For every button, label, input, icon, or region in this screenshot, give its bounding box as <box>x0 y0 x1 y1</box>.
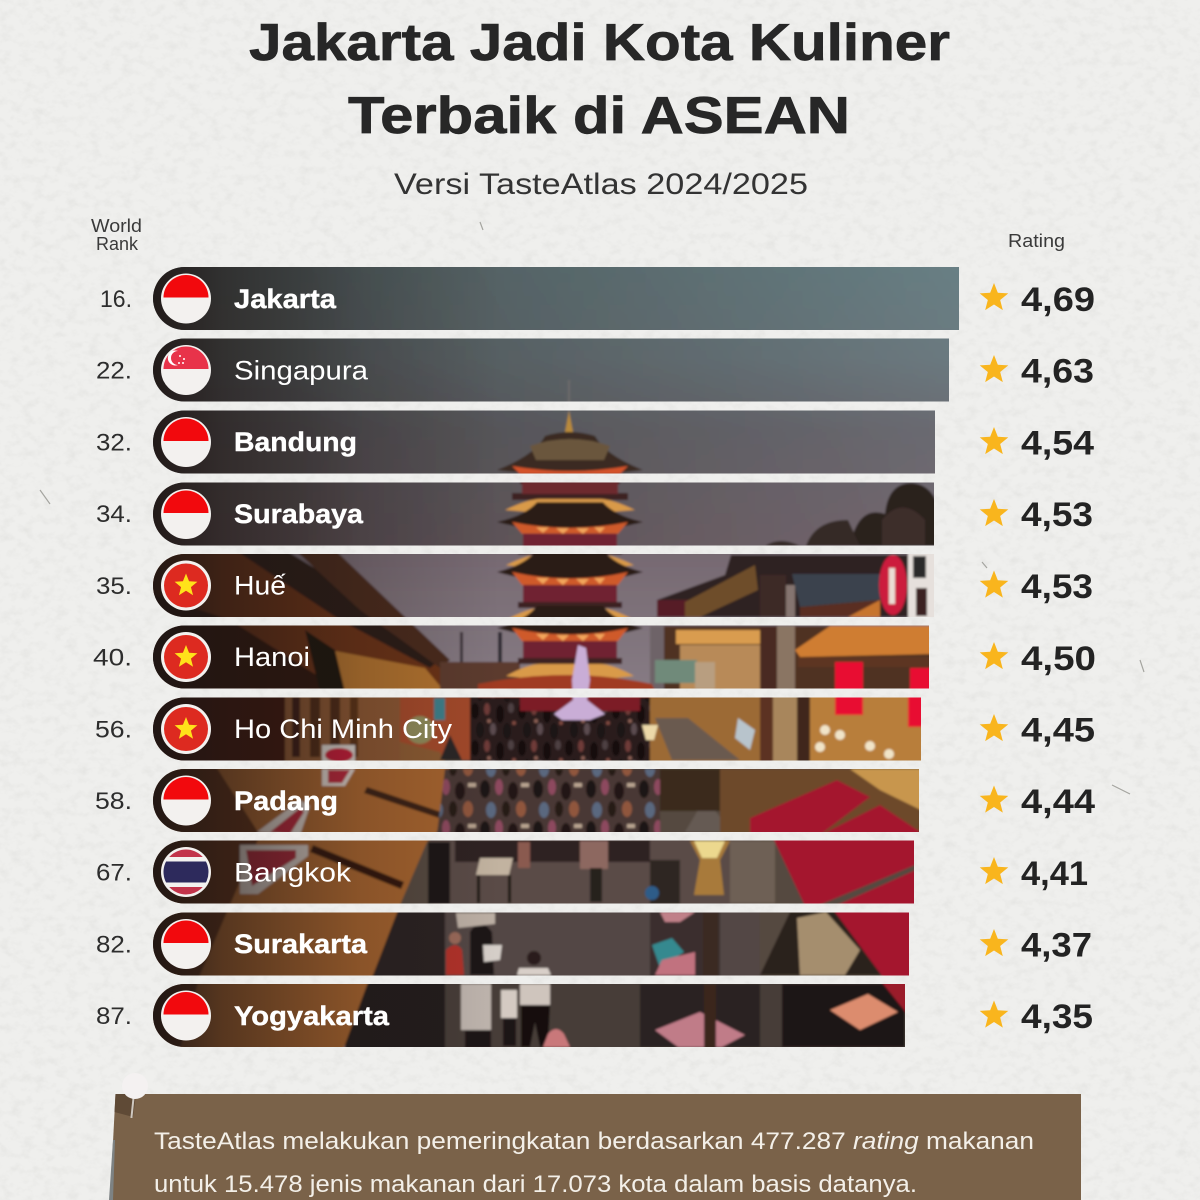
row 32 Bandung: 32. <box>96 430 132 456</box>
star <box>980 786 1008 813</box>
row 16 Jakarta: Jakarta <box>234 284 337 314</box>
right building upper <box>657 555 934 617</box>
icon: push pin <box>122 1073 148 1118</box>
row 16 Jakarta: 4,69 <box>1021 281 1095 319</box>
row 22 Singapura: 4,63 <box>1021 352 1094 390</box>
row 58 Padang: 58. <box>95 788 132 815</box>
red awnings <box>850 769 925 812</box>
row 32 Bandung: Bandung <box>234 427 357 457</box>
row 34 Surabaya: Surabaya <box>234 499 364 529</box>
flag: Indonesia <box>161 417 211 467</box>
crowd <box>470 697 650 762</box>
row 58 Padang: 4,44 <box>1021 783 1095 821</box>
photo bars: Jakarta street scene clipped to ranked bars <box>140 255 980 1065</box>
row 82 Surakarta: Surakarta <box>234 929 368 959</box>
row 34 Surabaya <box>96 489 1093 539</box>
row 34 Surabaya: 4,53 <box>1021 496 1093 534</box>
right building lower <box>648 698 762 760</box>
row 22 Singapura: 22. <box>96 358 132 384</box>
title: Terbaik di ASEAN <box>348 87 850 145</box>
row 40 Hanoi <box>93 632 1096 682</box>
row 35 Hue: Huế <box>234 570 286 600</box>
row 82 Surakarta: 4,37 <box>1021 926 1092 964</box>
pagoda <box>568 380 570 412</box>
column header: world rank: Rank <box>96 234 139 254</box>
row 56 Ho Chi Minh City <box>95 704 1095 754</box>
row 22 Singapura <box>96 345 1094 395</box>
flag: Indonesia <box>161 919 211 969</box>
row 87 Yogyakarta: Yogyakarta <box>234 1001 390 1031</box>
note text: TasteAtlas melakukan pemeringkatan berdasarkan 477.287 rating makanan <box>154 1128 1034 1155</box>
flag: Indonesia <box>161 990 211 1040</box>
title <box>249 14 950 145</box>
column header: world rank <box>91 216 142 254</box>
star <box>980 642 1008 669</box>
row 35 Hue: 4,53 <box>1021 568 1093 606</box>
domes <box>850 483 940 546</box>
flag: Singapore <box>161 345 211 395</box>
left tan awning <box>180 769 450 1047</box>
statue <box>554 645 605 720</box>
row 35 Hue <box>96 560 1093 610</box>
row 87 Yogyakarta: 87. <box>96 1003 132 1030</box>
flag: Indonesia <box>161 489 211 539</box>
lantern and building base <box>690 841 730 895</box>
flag: Vietnam <box>161 632 211 682</box>
row 32 Bandung <box>96 417 1094 467</box>
flag: Vietnam <box>161 560 211 610</box>
flag: Vietnam <box>161 704 211 754</box>
row 34 Surabaya: 34. <box>96 501 132 528</box>
column header: rating: Rating <box>1008 231 1065 251</box>
note text: untuk 15.478 jenis makanan dari 17.073 kota dalam basis datanya. <box>154 1171 917 1198</box>
row 16 Jakarta: 16. <box>100 286 132 313</box>
star <box>980 355 1008 382</box>
row 32 Bandung: 4,54 <box>1021 424 1094 462</box>
row 67 Bangkok: 67. <box>96 860 132 886</box>
star <box>980 714 1008 741</box>
floor <box>400 690 930 1050</box>
row 22 Singapura: Singapura <box>234 356 369 386</box>
row 56 Ho Chi Minh City: 56. <box>95 716 132 744</box>
row 58 Padang <box>95 776 1095 826</box>
flag: Thailand <box>161 847 211 897</box>
row 56 Ho Chi Minh City: 4,45 <box>1021 712 1095 750</box>
left building facade <box>153 698 286 760</box>
subtitle: Versi TasteAtlas 2024/2025 <box>394 168 808 201</box>
column header: world rank: World <box>91 216 142 236</box>
flag: Indonesia <box>161 776 211 826</box>
row 87 Yogyakarta: 4,35 <box>1021 998 1093 1036</box>
row 67 Bangkok: Bangkok <box>234 858 352 888</box>
people foreground <box>446 945 464 975</box>
row 58 Padang: Padang <box>234 786 338 816</box>
left building roofs <box>153 554 442 688</box>
row 82 Surakarta <box>96 919 1092 969</box>
tables and chairs <box>650 912 720 976</box>
row 35 Hue: 35. <box>96 573 132 600</box>
row 87 Yogyakarta <box>96 990 1093 1040</box>
star <box>980 499 1008 526</box>
row 40 Hanoi: 40. <box>93 644 132 672</box>
row 56 Ho Chi Minh City: Ho Chi Minh City <box>234 714 453 744</box>
star <box>980 570 1008 598</box>
flag: Indonesia <box>161 274 211 324</box>
note panel <box>109 1094 1081 1200</box>
left dark gradient <box>153 267 466 1047</box>
star <box>980 427 1008 454</box>
row 67 Bangkok: 4,41 <box>1021 855 1088 893</box>
title: Jakarta Jadi Kota Kuliner <box>249 14 950 72</box>
star <box>980 1000 1008 1028</box>
row 40 Hanoi: 4,50 <box>1021 640 1096 678</box>
star <box>980 857 1008 884</box>
row 40 Hanoi: Hanoi <box>234 642 310 672</box>
row 67 Bangkok <box>96 847 1088 897</box>
right building mid <box>662 626 929 688</box>
star <box>980 929 1008 956</box>
row 82 Surakarta: 82. <box>96 932 132 958</box>
row 16 Jakarta <box>100 274 1095 324</box>
note text <box>154 1128 1034 1198</box>
star <box>980 283 1008 310</box>
